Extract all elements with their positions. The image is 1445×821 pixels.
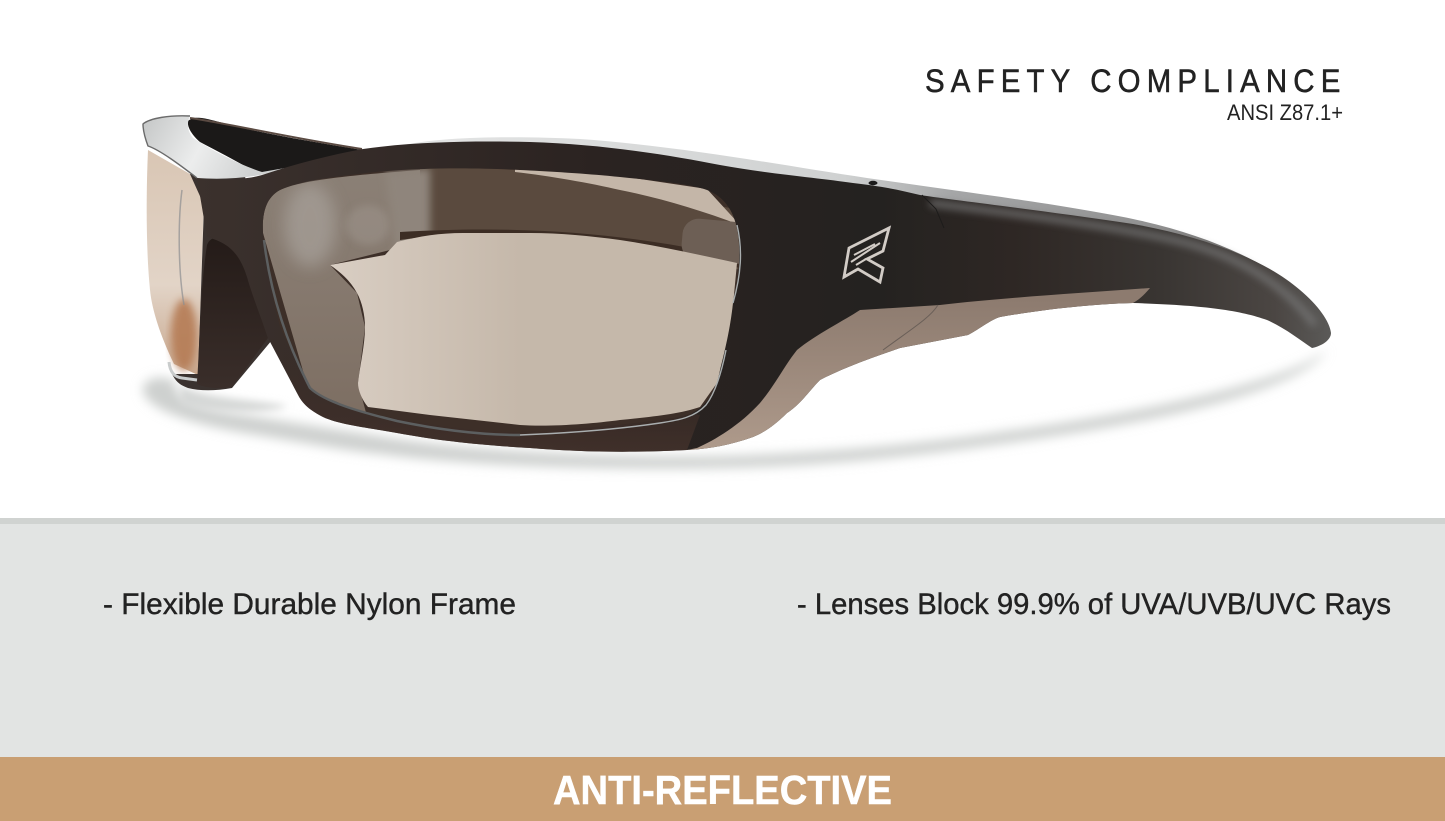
lens left and lower rim bbox=[264, 240, 520, 435]
lens reflection: rounded pad bbox=[682, 218, 740, 264]
hinge seam bbox=[922, 195, 944, 228]
lens reflection: light strip bbox=[385, 168, 430, 246]
temple top sheen bbox=[930, 203, 1315, 325]
panel: features background bbox=[0, 524, 1445, 757]
lens rim highlight bbox=[520, 225, 740, 435]
brow highlight bbox=[143, 116, 285, 179]
feature text: frame: - Flexible Durable Nylon Frame bbox=[103, 588, 516, 621]
tan lower frame panel bbox=[687, 288, 1150, 450]
panel: lens type banner bbox=[0, 757, 1445, 821]
lens reflection: mottled patch bbox=[284, 183, 336, 267]
subtitle: standard: ANSI Z87.1+ bbox=[1227, 100, 1343, 125]
divider band bbox=[0, 518, 1445, 524]
nose frame bbox=[172, 174, 272, 390]
lens clear bright area bbox=[330, 233, 737, 426]
lens reflection: upper mottle bbox=[348, 206, 388, 244]
background: white upper area bbox=[0, 0, 1445, 518]
tan panel seam bbox=[883, 305, 938, 350]
far temple inside bbox=[188, 118, 362, 172]
feature text: lenses: - Lenses Block 99.9% of UVA/UVB/UVC Rays bbox=[797, 588, 1391, 621]
rivet dot bbox=[868, 181, 878, 185]
title: safety compliance: SAFETY COMPLIANCE bbox=[925, 63, 1346, 99]
far lens bbox=[147, 150, 204, 375]
far lens lower rim bbox=[169, 362, 197, 380]
main lens bbox=[262, 168, 740, 426]
frame lower warm shading bbox=[268, 338, 700, 452]
brow outer edge bbox=[143, 116, 197, 178]
far temple top edge bbox=[190, 118, 362, 149]
illustration: ground shadow bbox=[143, 350, 1327, 468]
lens reflection: temple shadow bbox=[400, 230, 740, 268]
main frame and temple bbox=[197, 142, 1331, 452]
logo mark bbox=[844, 228, 889, 282]
nose pad bbox=[197, 237, 268, 388]
top edge highlight strip bbox=[400, 137, 1280, 276]
lens reflection: tan wedge bbox=[515, 168, 740, 225]
lens reflection: upper band bbox=[420, 168, 742, 270]
banner label: ANTI-REFLECTIVE bbox=[553, 767, 892, 813]
illustration: safety glasses bbox=[143, 116, 1331, 452]
